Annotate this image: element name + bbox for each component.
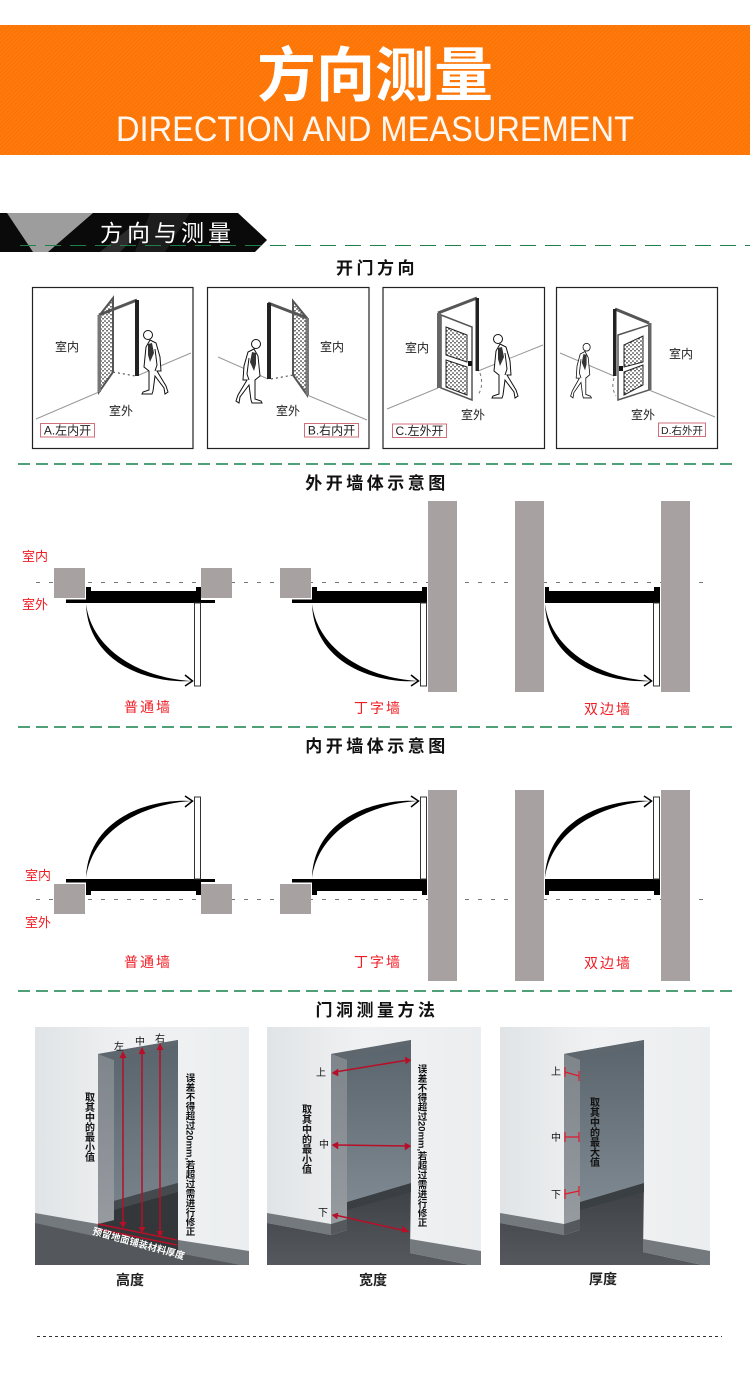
heading: inward wall diagrams: 内开墙体示意图 bbox=[305, 736, 449, 756]
ribbon title: 方向与测量 bbox=[100, 220, 235, 246]
panel: thickness measurement: 取其中的最大值 bbox=[588, 1097, 600, 1168]
label: outdoor: 室外 bbox=[25, 915, 51, 930]
label: indoor: 室内 bbox=[22, 549, 48, 564]
panel: height measurement: 右 bbox=[155, 1032, 165, 1045]
title: 方向测量 bbox=[257, 43, 493, 109]
heading: door direction: 开门方向 bbox=[336, 258, 418, 278]
panel: B right inward: 室内 bbox=[320, 339, 344, 354]
diagram: outward, double wall bbox=[515, 501, 690, 717]
panel: height measurement bbox=[35, 1027, 249, 1265]
panel: A left inward: 室外 bbox=[109, 403, 133, 418]
panel: height measurement: 误差不得超过20mm,若超过需进行修正 bbox=[184, 1072, 195, 1236]
panel: thickness measurement bbox=[500, 1027, 710, 1265]
panel: thickness measurement: 上 bbox=[551, 1066, 561, 1078]
panel: thickness measurement: 下 bbox=[551, 1190, 561, 1201]
header banner bbox=[0, 25, 750, 155]
panel: D right outward: 室内 bbox=[669, 346, 693, 361]
caption: 普通墙 bbox=[124, 699, 172, 715]
red measure arrows bbox=[98, 1048, 177, 1245]
panel: width measurement: 上 bbox=[316, 1067, 326, 1079]
panel: A left inward: A.左内开 bbox=[44, 422, 91, 438]
panel: width measurement: 中 bbox=[319, 1138, 329, 1151]
caption: height: 高度 bbox=[116, 1272, 144, 1288]
panel: B right inward: B.右内开 bbox=[308, 422, 355, 438]
caption: 普通墙 bbox=[124, 954, 172, 970]
panel: height measurement: 中 bbox=[135, 1035, 145, 1048]
panel: B right inward: 室外 bbox=[276, 403, 300, 418]
label: indoor: 室内 bbox=[25, 868, 51, 883]
diagram: outward, T wall bbox=[280, 501, 457, 716]
red measure arrows bbox=[332, 1057, 411, 1232]
panel: width measurement bbox=[267, 1027, 481, 1265]
diagram: inward, T wall bbox=[280, 790, 457, 981]
panel: height measurement: 预留地面铺装材料厚度 bbox=[91, 1225, 186, 1262]
panel: A left inward bbox=[32, 288, 193, 448]
panel: thickness measurement: 中 bbox=[551, 1131, 561, 1144]
panel: C left outward: 室内 bbox=[405, 340, 429, 355]
panel: C left outward: C.左外开 bbox=[395, 423, 444, 438]
panel: width measurement: 误差不得超过20mm,若超过需进行修正 bbox=[416, 1063, 427, 1227]
panel: height measurement: 取其中的最小值 bbox=[82, 1092, 94, 1163]
panel: width measurement: 下 bbox=[318, 1208, 328, 1219]
caption: thickness: 厚度 bbox=[589, 1271, 617, 1287]
panel: D right outward: 室外 bbox=[631, 407, 655, 422]
diagram: outward, normal wall bbox=[54, 568, 232, 715]
panel: B right inward bbox=[208, 288, 369, 448]
caption: 双边墙 bbox=[584, 701, 632, 717]
caption: width: 宽度 bbox=[359, 1272, 387, 1288]
caption: 丁字墙 bbox=[354, 700, 402, 716]
panel: D right outward bbox=[556, 288, 718, 448]
panel: C left outward bbox=[383, 288, 544, 448]
panel: A left inward: 室内 bbox=[55, 339, 79, 354]
diagram: inward, double wall bbox=[515, 790, 690, 981]
caption: 双边墙 bbox=[584, 955, 632, 971]
red thickness markers bbox=[565, 1067, 579, 1199]
panel: C left outward: 室外 bbox=[461, 407, 485, 422]
label: outdoor: 室外 bbox=[22, 597, 48, 612]
section ribbon bbox=[0, 213, 750, 252]
diagram: inward, normal wall bbox=[54, 796, 232, 970]
panel: D right outward: D.右外开 bbox=[661, 424, 703, 437]
caption: 丁字墙 bbox=[354, 954, 402, 970]
heading: outward wall diagrams: 外开墙体示意图 bbox=[305, 473, 449, 493]
panel: height measurement: 左 bbox=[114, 1040, 124, 1053]
heading: opening measurement: 门洞测量方法 bbox=[316, 1000, 438, 1020]
subtitle: DIRECTION AND MEASUREMENT bbox=[116, 110, 634, 149]
panel: width measurement: 取其中的最小值 bbox=[300, 1104, 312, 1175]
